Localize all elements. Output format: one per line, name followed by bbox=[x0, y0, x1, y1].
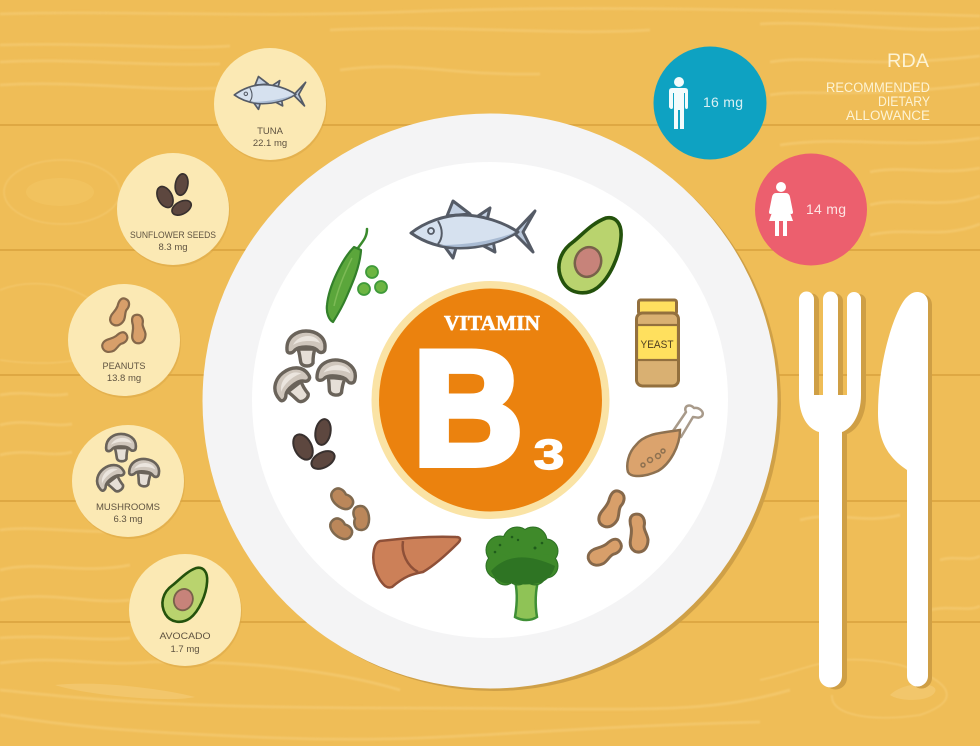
label: 6.3 mg bbox=[113, 514, 143, 525]
icon: woman bbox=[769, 182, 793, 236]
label: 13.8 mg bbox=[107, 373, 141, 384]
icon: mushrooms on plate bbox=[268, 331, 357, 412]
icon: yeast jar bbox=[636, 300, 678, 386]
heading: 3: 3 bbox=[534, 431, 564, 479]
label: 8.3 mg bbox=[158, 242, 188, 253]
panel: sunflower seeds source bbox=[117, 153, 230, 267]
panel: peanuts source bbox=[68, 284, 181, 398]
label: PEANUTS bbox=[102, 361, 146, 372]
icon: peanuts bbox=[100, 296, 147, 355]
icon: yeast jar: YEAST bbox=[640, 339, 674, 351]
panel: RDA women bbox=[755, 154, 867, 266]
text: recommended dietary allowance: DIETARY bbox=[878, 94, 930, 109]
icon: mushrooms bbox=[92, 434, 160, 500]
value: 14 mg bbox=[806, 201, 846, 217]
icon: broccoli bbox=[486, 528, 558, 620]
icon: avocado bbox=[162, 568, 207, 622]
icon: chicken drumstick bbox=[627, 405, 703, 476]
heading: RDA: RDA bbox=[887, 51, 929, 72]
label: 1.7 mg bbox=[170, 644, 200, 655]
heading: RDA bbox=[826, 51, 930, 123]
panel: tuna source bbox=[214, 48, 327, 162]
icon: tuna bbox=[234, 77, 306, 109]
label: MUSHROOMS bbox=[96, 502, 160, 513]
label: AVOCADO bbox=[160, 631, 210, 642]
text: recommended dietary allowance: RECOMMENDED bbox=[826, 80, 930, 95]
value: 16 mg bbox=[703, 94, 743, 110]
heading: B: B bbox=[413, 318, 523, 499]
fork and knife shadows bbox=[804, 294, 932, 690]
icon: man bbox=[669, 77, 688, 129]
text: recommended dietary allowance: ALLOWANCE bbox=[846, 108, 930, 123]
icon: liver bbox=[373, 537, 460, 587]
heading: vitamin: VITAMIN bbox=[444, 311, 540, 335]
label: SUNFLOWER SEEDS bbox=[130, 230, 216, 241]
icon: avocado on plate bbox=[559, 218, 621, 293]
icon: knife bbox=[878, 292, 928, 686]
label: 22.1 mg bbox=[253, 138, 287, 149]
icon: beans bbox=[327, 486, 370, 543]
panel: mushrooms source bbox=[72, 425, 185, 539]
icon: sunflower seeds bbox=[154, 173, 194, 218]
vitamin B3 badge bbox=[372, 281, 610, 519]
panel: avocado source bbox=[129, 554, 242, 668]
icon: peanuts on plate bbox=[585, 488, 650, 569]
label: TUNA bbox=[257, 126, 284, 137]
panel: RDA men bbox=[654, 46, 766, 160]
icon: fork bbox=[799, 292, 861, 688]
icon: sunflower seeds on plate bbox=[289, 418, 338, 472]
panel: plate bbox=[202, 114, 781, 691]
icon: green bean and peas bbox=[327, 229, 387, 322]
icon: tuna on plate bbox=[411, 201, 535, 258]
